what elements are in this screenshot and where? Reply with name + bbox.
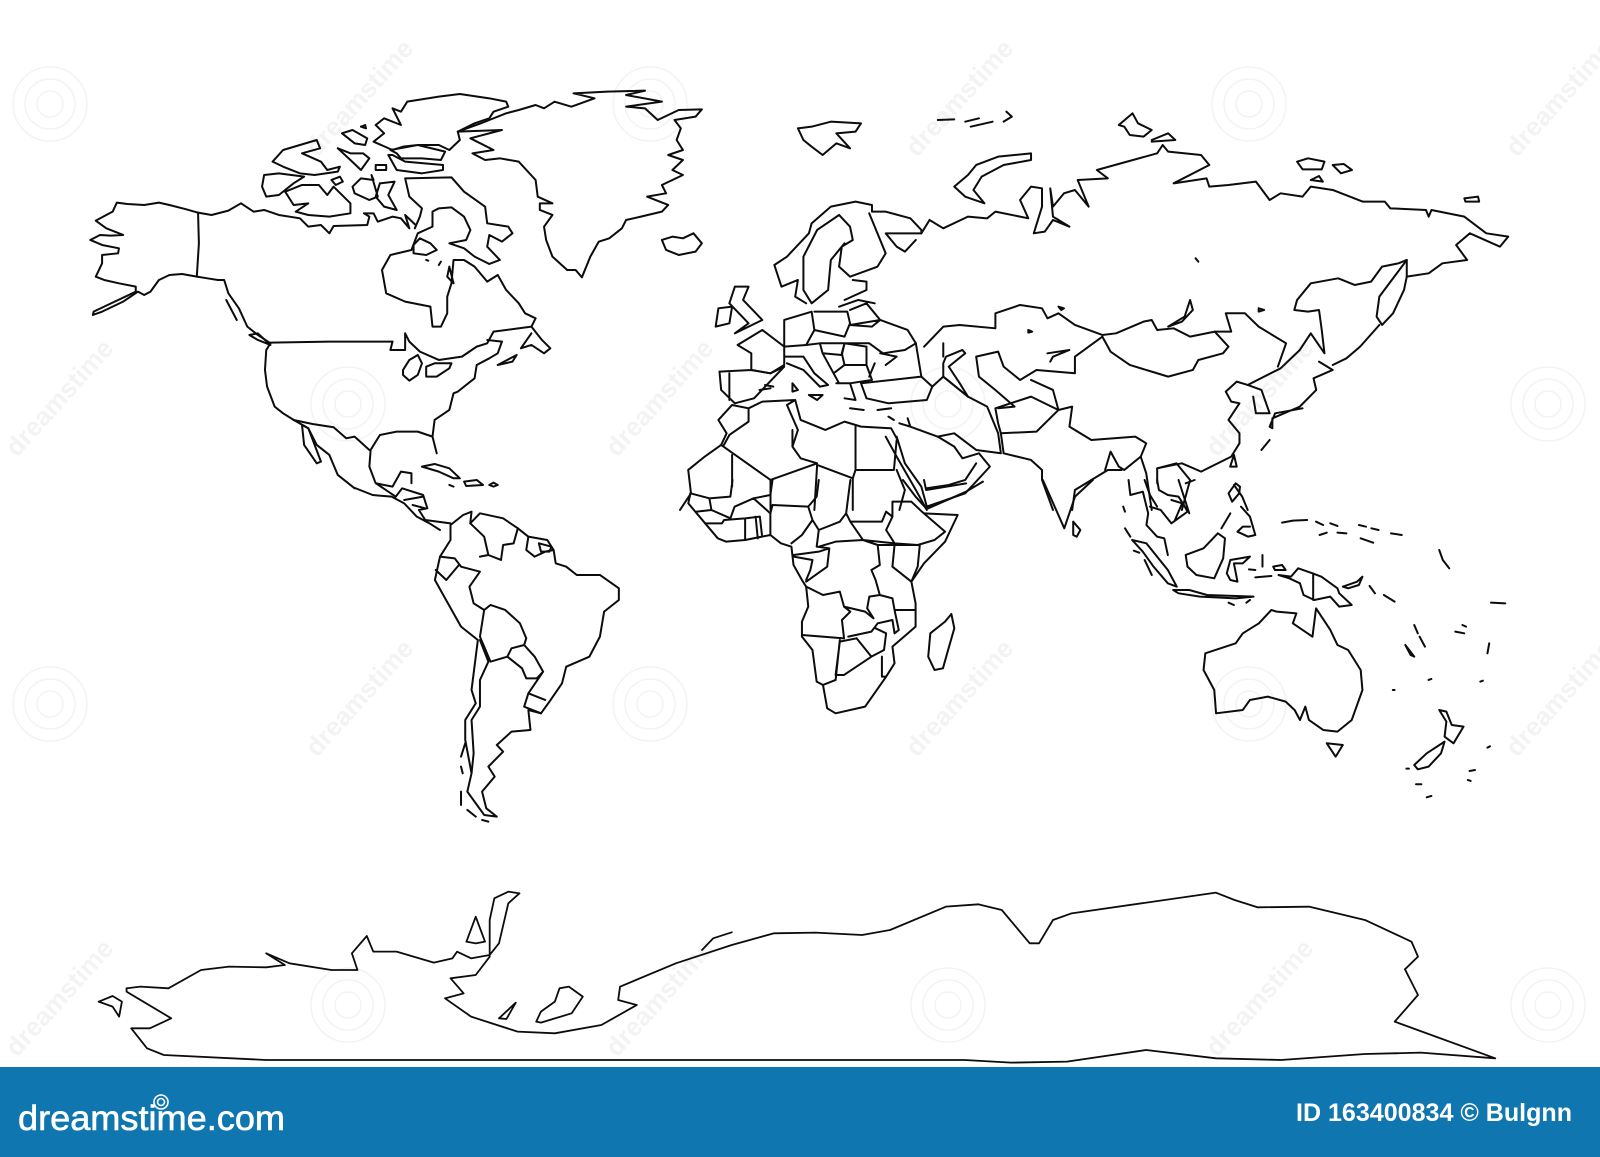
Russia Kazakhstan border [924, 305, 1286, 367]
Baikal and inland lakes [1028, 258, 1264, 362]
Indochina and Malay Peninsula [1129, 480, 1195, 555]
Great Britain and Ireland [716, 287, 762, 333]
Southeast Asia, Oceania and Australia [1043, 480, 1505, 797]
India [1004, 453, 1122, 510]
watermark text: dreamstime [599, 333, 719, 462]
Canada US border [197, 213, 393, 343]
world map outline [90, 91, 1508, 1063]
watermark text: dreamstime [0, 933, 119, 1062]
Mediterranean islands [760, 383, 894, 420]
Madagascar [928, 614, 954, 670]
Eurasia and North Africa [680, 112, 1508, 510]
watermark text: dreamstime [0, 333, 119, 462]
watermark text: dreamstime [1199, 333, 1319, 462]
Western and Central Europe borders [738, 280, 916, 400]
Antarctic mainland outline [127, 892, 1495, 1063]
New Zealand [1414, 710, 1464, 769]
image ID credit: ID 163400834 © Bulgnn [1296, 1099, 1572, 1127]
Philippines [1221, 483, 1255, 537]
Tasmania [1327, 743, 1343, 757]
Russia north coast [921, 145, 1508, 483]
watermark text: dreamstime [1199, 933, 1319, 1062]
logo wordmark: dreamstime.com [18, 1099, 285, 1138]
Mongolia [1102, 332, 1228, 377]
Caribbean islands [422, 464, 498, 487]
Spain and Portugal [719, 367, 784, 403]
footer banner [0, 1067, 1600, 1157]
China coast details and Southeast Asia [1141, 457, 1248, 510]
Iceland [662, 233, 702, 255]
Scandinavia, Finland and Kola [774, 202, 921, 303]
Turkey and Black Sea [861, 343, 932, 403]
Central America [355, 483, 450, 530]
watermark text: dreamstime [299, 33, 419, 162]
Sumatra, Java, Borneo, Sulawesi [1132, 533, 1254, 598]
Alaska and Canada mainland [90, 203, 355, 488]
Canada north coast and Hudson Bay [198, 177, 536, 360]
watermark text: dreamstime [899, 33, 1019, 162]
Greenland [458, 91, 702, 277]
Africa outline [688, 493, 958, 713]
North America, Greenland and Iceland [90, 91, 702, 488]
South America borders [436, 523, 554, 773]
watermark text: dreamstime [599, 933, 719, 1062]
South America outline [435, 512, 619, 817]
logo spiral icon [154, 1095, 168, 1109]
North Africa coast and borders [680, 400, 927, 510]
Central America, South America and Africa [355, 480, 983, 822]
Antarctic islands [99, 917, 732, 1023]
Central Asia borders [932, 337, 1146, 470]
Novaya Zemlya [954, 153, 1031, 203]
watermark text: dreamstime [299, 633, 419, 762]
India tip and Sri Lanka [1043, 480, 1093, 537]
Caspian Sea [943, 350, 968, 397]
Chilean islands [461, 743, 488, 822]
Kamchatka, Sakhalin, Korea, Japan, Taiwan [1230, 260, 1407, 467]
Svalbard and Arctic islands [798, 112, 1479, 202]
Baja California and Pacific islands [226, 300, 321, 463]
Arabian Peninsula [897, 418, 990, 507]
Africa borders [690, 480, 983, 685]
Australia [1204, 608, 1362, 732]
Arctic islands [262, 94, 508, 283]
Antarctica [99, 892, 1495, 1063]
Great Lakes [403, 355, 451, 381]
Pacific island dashes [1123, 507, 1505, 797]
watermark text: dreamstime [899, 633, 1019, 762]
New Guinea [1273, 565, 1362, 607]
USA east and Gulf coast [294, 327, 550, 487]
